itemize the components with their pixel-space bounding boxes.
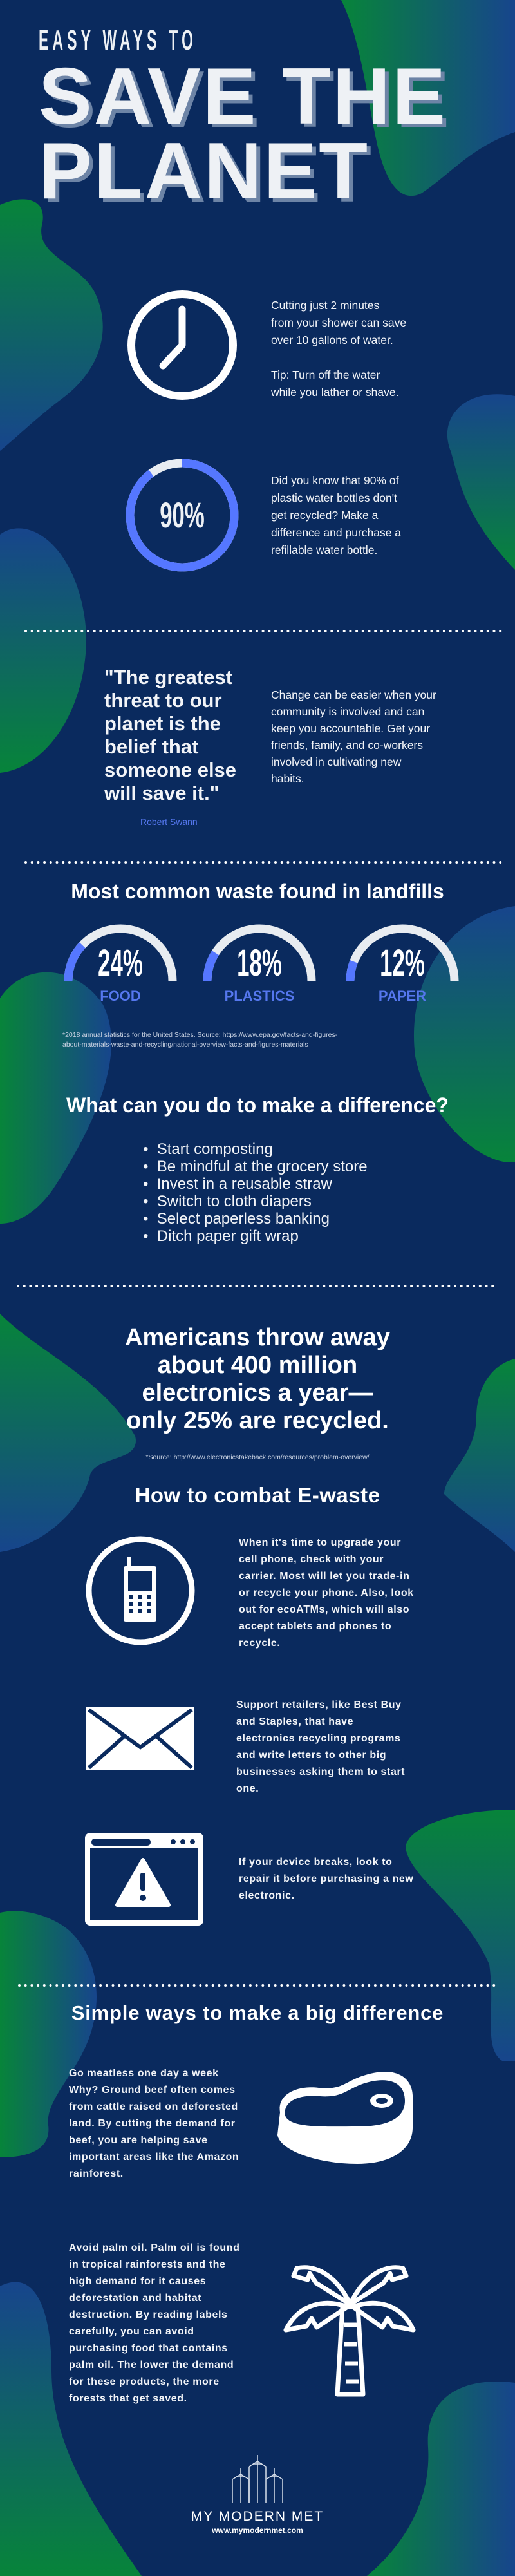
footnote: epa source: about-materials-waste-and-recycling/national-overview-facts-and-figures-materials <box>62 1041 308 1048</box>
text: phone recycling: When it's time to upgrade your <box>239 1537 401 1548</box>
footnote: e-waste source: *Source: http://www.electronicstakeback.com/resources/problem-overview/ <box>145 1454 370 1461</box>
text: shower tip: from your shower can save <box>271 316 406 329</box>
logo: my modern met <box>191 2455 324 2535</box>
text: phone recycling: accept tablets and phones to <box>239 1621 391 1632</box>
text: phone recycling: out for ecoATMs, which will also <box>239 1604 409 1615</box>
title: save the planet <box>39 52 447 216</box>
logo: my modern met: www.mymodernmet.com <box>212 2526 303 2535</box>
text: shower tip <box>271 299 406 399</box>
chart: gauges <box>64 925 458 1004</box>
text: community: Change can be easier when your <box>271 688 436 701</box>
title: easy ways to: EASY WAYS TO <box>39 24 197 56</box>
text: community: community is involved and can <box>271 705 424 718</box>
text: meatless: beef, you are helping save <box>69 2135 208 2146</box>
list: actions: • Invest in a reusable straw <box>143 1175 332 1193</box>
gauge: plastics <box>225 942 294 1004</box>
text: community: involved in cultivating new <box>271 755 401 768</box>
text: meatless: Why? Ground beef often comes <box>69 2085 236 2096</box>
icon: envelope <box>86 1707 194 1770</box>
text: retailers: and Staples, that have <box>236 1716 353 1727</box>
text: community <box>271 688 436 785</box>
text: meatless: rainforest. <box>69 2168 124 2179</box>
text: palm oil: for these products, the more <box>69 2376 220 2387</box>
text: retailers: businesses asking them to start <box>236 1766 405 1777</box>
footnote: epa source: *2018 annual statistics for the United States. Source: https://www.epa.gov/facts-and-figures- <box>62 1031 337 1039</box>
list: actions: • Select paperless banking <box>143 1210 330 1227</box>
text: phone recycling: recycle. <box>239 1638 280 1649</box>
text: palm oil: destruction. By reading labels <box>69 2309 228 2320</box>
heading: americans e-waste stat: Americans throw away <box>125 1324 390 1351</box>
chart: 90% ring: 90% <box>160 495 205 535</box>
gauge: food <box>98 942 143 1004</box>
list: actions: • Ditch paper gift wrap <box>143 1227 299 1245</box>
text: palm oil: in tropical rainforests and the <box>69 2259 226 2270</box>
heading: americans e-waste stat: about 400 million <box>158 1352 357 1379</box>
text: retailers: one. <box>236 1783 259 1794</box>
text: retailers: Support retailers, like Best Buy <box>236 1700 402 1710</box>
text: shower tip: Cutting just 2 minutes <box>271 299 379 312</box>
title: save the planet: SAVE THE <box>39 52 447 141</box>
icon: palm tree <box>283 2265 416 2397</box>
quote: "The greatest threat to our planet is the belief that someone else will save it." <box>104 666 236 804</box>
list: actions: • Be mindful at the grocery store <box>143 1158 368 1175</box>
text: meatless: land. By cutting the demand for <box>69 2118 236 2129</box>
text: retailers: electronics recycling programs <box>236 1733 400 1744</box>
list: actions: • Switch to cloth diapers <box>143 1193 312 1210</box>
icon: phone <box>86 1537 194 1645</box>
heading: landfills: Most common waste found in landfills <box>71 880 444 903</box>
text: plastic bottles: difference and purchase a <box>271 526 401 539</box>
list: actions <box>143 1141 368 1245</box>
text: palm oil <box>69 2242 239 2404</box>
text: plastic bottles: plastic water bottles don't <box>271 491 397 504</box>
footnote: epa source <box>62 1031 337 1048</box>
text: retailers <box>236 1700 405 1794</box>
text: palm oil: high demand for it causes <box>69 2276 206 2287</box>
icon: warning window <box>85 1833 203 1926</box>
text: community: keep you accountable. Get your <box>271 722 430 735</box>
text: palm oil: deforestation and habitat <box>69 2293 201 2304</box>
text: phone recycling: or recycle your phone. Also, look <box>239 1587 414 1598</box>
text: palm oil: carefully, you can avoid <box>69 2326 194 2337</box>
heading: americans e-waste stat: only 25% are recycled. <box>126 1407 389 1434</box>
text: shower tip: Tip: Turn off the water <box>271 368 380 381</box>
text: palm oil: Avoid palm oil. Palm oil is found <box>69 2242 239 2253</box>
text: palm oil: purchasing food that contains <box>69 2343 228 2354</box>
gauge: food: FOOD <box>100 988 141 1004</box>
title: save the planet: PLANET <box>39 127 370 216</box>
text: plastic bottles: refillable water bottle. <box>271 544 377 556</box>
text: repair: electronic. <box>239 1890 295 1901</box>
gauge: paper: 12% <box>380 942 425 984</box>
heading: how to combat e-waste: How to combat E-waste <box>135 1483 380 1507</box>
text: repair: If your device breaks, look to <box>239 1857 393 1868</box>
text: shower tip: while you lather or shave. <box>271 386 398 399</box>
text: meatless: important areas like the Amazon <box>69 2152 239 2163</box>
gauge: paper: PAPER <box>379 988 426 1004</box>
text: retailers: and write letters to other big <box>236 1750 386 1761</box>
quote author: Robert Swann <box>140 817 198 827</box>
gauge: paper <box>379 942 426 1004</box>
heading: what can you do: What can you do to make a difference? <box>66 1094 449 1117</box>
gauge: plastics: PLASTICS <box>225 988 294 1004</box>
text: plastic bottles: get recycled? Make a <box>271 509 378 522</box>
icon: steak <box>277 2072 413 2164</box>
text: plastic bottles: Did you know that 90% of <box>271 474 398 487</box>
text: meatless: from cattle raised on deforested <box>69 2101 238 2112</box>
text: meatless <box>69 2068 239 2179</box>
logo: my modern met: MY MODERN MET <box>191 2509 324 2524</box>
list: actions: • Start composting <box>143 1141 273 1158</box>
text: palm oil: forests that get saved. <box>69 2393 187 2404</box>
text: repair: repair it before purchasing a new <box>239 1873 413 1884</box>
heading: simple ways: Simple ways to make a big difference <box>71 2002 444 2024</box>
text: community: habits. <box>271 772 304 785</box>
chart: 90% ring <box>126 459 238 572</box>
gauge: plastics: 18% <box>237 942 282 984</box>
text: shower tip: over 10 gallons of water. <box>271 334 393 346</box>
text: phone recycling: cell phone, check with your <box>239 1554 384 1565</box>
text: community: friends, family, and co-workers <box>271 739 423 752</box>
icon: clock <box>127 290 237 400</box>
text: repair <box>239 1857 413 1901</box>
heading: americans e-waste stat <box>125 1324 390 1434</box>
heading: americans e-waste stat: electronics a year— <box>142 1379 373 1406</box>
text: phone recycling: carrier. Most will let you trade-in <box>239 1571 410 1582</box>
text: plastic bottles <box>271 474 401 556</box>
gauge: food: 24% <box>98 942 143 984</box>
text: phone recycling <box>239 1537 414 1649</box>
text: meatless: Go meatless one day a week <box>69 2068 219 2079</box>
text: palm oil: palm oil. The lower the demand <box>69 2360 234 2371</box>
